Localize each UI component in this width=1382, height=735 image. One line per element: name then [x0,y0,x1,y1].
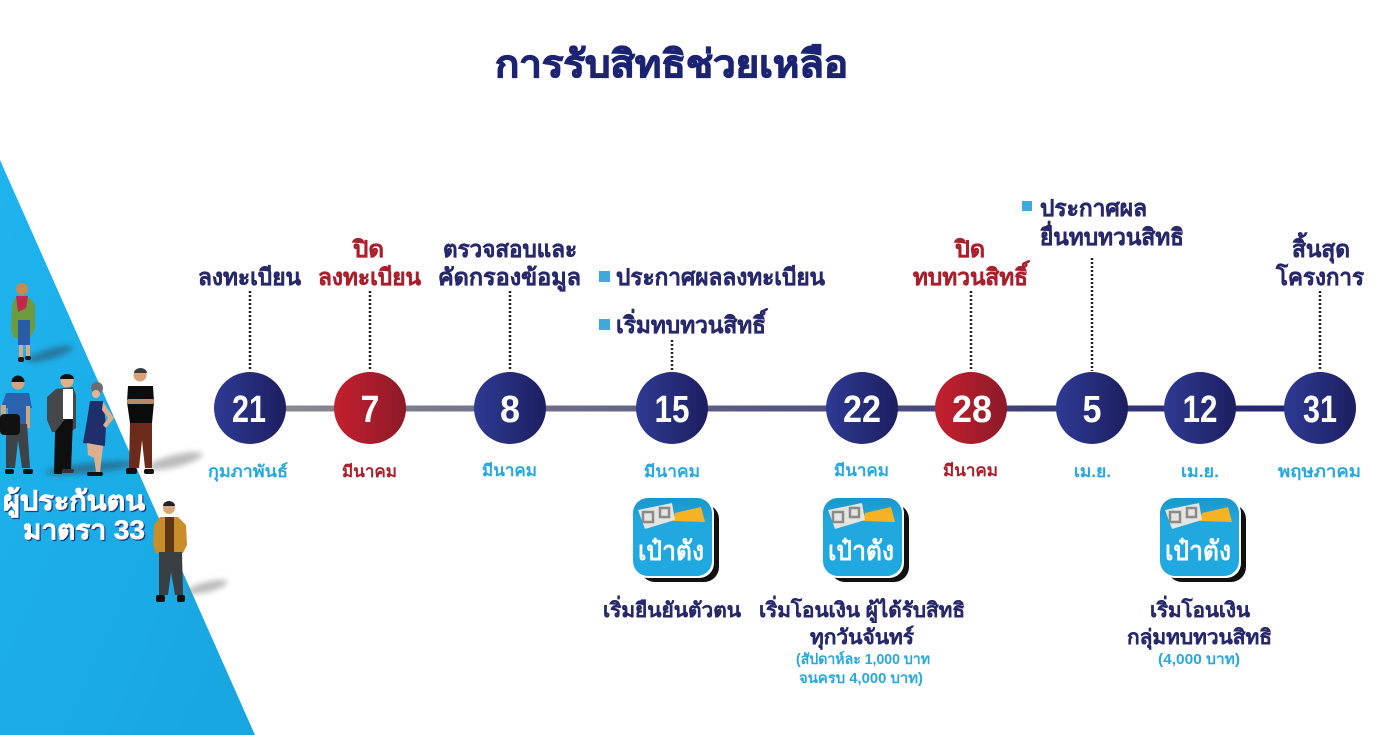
heading: ปิด [953,236,985,262]
date circle [826,372,898,444]
description: เริ่มโอนเงิน [1150,595,1250,622]
icon: Pao Tang app [633,498,719,582]
label: insured persons section 33: ผู้ประกันตน [3,486,146,518]
date circle: 8 [500,389,520,431]
heading [318,236,421,290]
description: เริ่มโอนเงิน ผู้ได้รับสิทธิ [759,595,965,624]
icon: Pao Tang app: เป๋าตัง [828,536,894,566]
heading [599,264,825,338]
description [759,595,965,687]
date circle [935,372,1007,444]
heading: ยื่นทบทวนสิทธิ [1039,220,1184,250]
label: insured persons section 33: มาตรา 33 [23,515,145,545]
month: พฤษภาคม [1278,463,1361,481]
heading: ลงทะเบียน [198,264,301,290]
step: 22 March start transfers [759,372,965,687]
date circle [214,372,286,444]
person: man in grey suit [47,374,76,474]
month: เม.ย. [1181,463,1219,481]
date circle: 5 [1082,389,1102,431]
heading: ตรวจสอบและ [443,236,577,262]
date circle: 7 [360,389,380,431]
description: (4,000 บาท) [1158,652,1240,668]
month: กุมภาพันธ์ [208,462,288,482]
person: man in mustard jacket [153,501,187,602]
date circle: 31 [1303,389,1337,431]
date circle: 21 [232,389,266,431]
step: 7 March close registration [318,236,421,481]
month: มีนาคม [482,461,537,480]
icon: Pao Tang app [823,498,909,582]
step: 12 April appeal transfers [1127,372,1272,668]
step: 8 March verify [438,236,581,480]
timeline line [250,406,1320,412]
title: การรับสิทธิช่วยเหลือ [495,44,848,86]
label: insured persons section 33 [3,486,146,545]
month: มีนาคม [834,461,889,480]
step: 15 March announce results [599,264,825,622]
heading: สิ้นสุด [1292,232,1350,264]
step: 5 April announce appeal results [1022,195,1184,481]
person: woman in green coat [11,283,35,362]
icon: Pao Tang app: เป๋าตัง [638,536,704,566]
description: (สัปดาห์ละ 1,000 บาท [796,650,930,668]
date circle [474,372,546,444]
date circle [636,372,708,444]
date circle: 12 [1182,389,1218,431]
heading [438,236,581,292]
person: woman in navy dress [83,382,114,476]
heading [1275,232,1365,290]
blue triangle background [0,160,255,735]
icon: Pao Tang app [1160,498,1246,582]
person: man in black shirt [126,368,154,474]
panel: blue triangle with people [0,160,255,735]
heading: ทบทวนสิทธิ์ [913,260,1030,290]
date circle: 28 [952,389,992,431]
heading: คัดกรองข้อมูล [438,264,581,292]
icon: Pao Tang app: เป๋าตัง [1165,536,1231,566]
step: 21 February register [198,264,301,482]
description: ทุกวันจันทร์ [810,625,914,650]
month: เม.ย. [1074,463,1111,481]
description: เริ่มยืนยันตัวตน [603,595,741,622]
heading: ลงทะเบียน [318,264,421,290]
date circle [1164,372,1236,444]
heading [1022,195,1184,250]
step: 31 May project ends [1275,232,1365,481]
heading: โครงการ [1275,263,1365,290]
person shadows [26,343,229,597]
heading: ประกาศผลลงทะเบียน [616,264,825,290]
date circle [334,372,406,444]
heading [913,236,1030,290]
date circle [1056,372,1128,444]
month: มีนาคม [943,461,998,480]
date circle [1284,372,1356,444]
description [1127,595,1272,668]
month: มีนาคม [342,462,397,481]
date circle: 15 [654,389,690,431]
step: 28 March close appeals [913,236,1030,480]
heading: ปิด [351,236,384,262]
month: มีนาคม [644,462,700,481]
description: จนครบ 4,000 บาท) [799,671,923,687]
date circle: 22 [843,389,881,431]
description: กลุ่มทบทวนสิทธิ [1127,626,1272,650]
heading: เริ่มทบทวนสิทธิ์ [616,308,768,338]
person: man with blue shirt and bag [0,376,33,474]
heading: ประกาศผล [1040,195,1147,221]
